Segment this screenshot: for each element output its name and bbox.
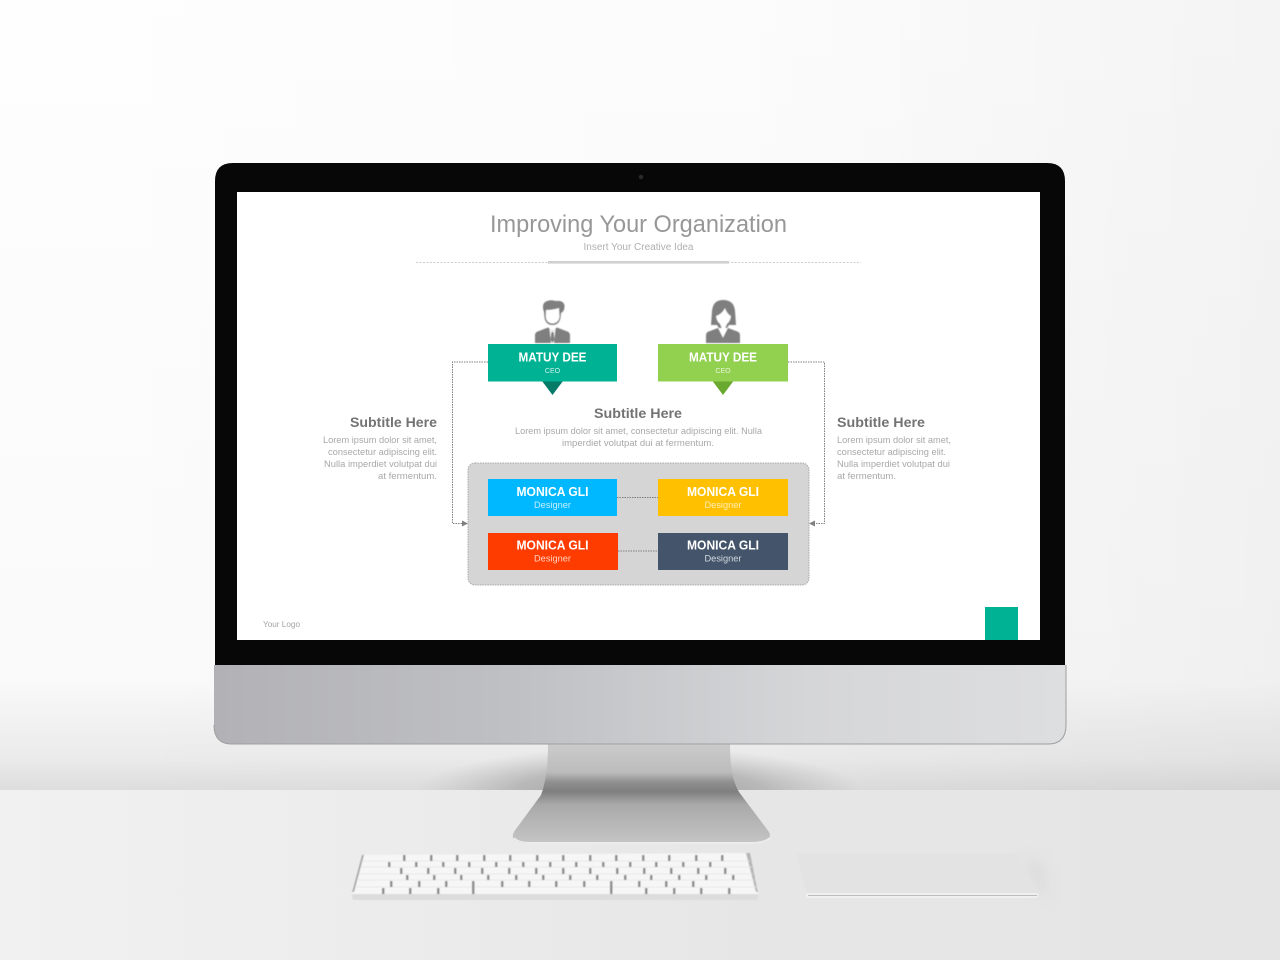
monitor bezel: [215, 163, 1065, 665]
monitor chin edge: [214, 665, 1066, 744]
card: Matuy Dee green: [658, 344, 788, 395]
text block: left: Lorem ipsum dolor sit amet,: [323, 435, 437, 446]
card: Matuy Dee green: CEO: [715, 368, 731, 375]
accent square: [985, 607, 1018, 640]
monitor stand: [513, 744, 770, 844]
card: Monica Gli blue: MONICA GLI: [516, 485, 588, 499]
logo text: Your Logo: [263, 619, 300, 629]
text block: left: Subtitle Here: [350, 415, 437, 430]
card: Monica Gli red: MONICA GLI: [516, 538, 588, 552]
text block: right: at fermentum.: [837, 471, 896, 482]
card: Monica Gli blue: Designer: [534, 500, 571, 511]
text block: left: Nulla imperdiet volutpat dui: [324, 459, 437, 470]
card: Monica Gli red: Designer: [534, 554, 571, 564]
card: Monica Gli yellow: Designer: [704, 500, 742, 511]
trackpad: [797, 853, 1048, 898]
card: Monica Gli navy: Designer: [704, 554, 742, 564]
text block: right: Subtitle Here: [837, 415, 926, 430]
text block: right: consectetur adipiscing elit.: [837, 447, 946, 458]
text block: right: [837, 415, 951, 482]
card: Matuy Dee teal: CEO: [545, 368, 561, 375]
connector: left: [452, 362, 488, 526]
screen: [237, 192, 1040, 640]
icon: man: [535, 300, 570, 343]
camera: [639, 175, 643, 179]
title divider: [416, 261, 861, 264]
monitor: [214, 163, 1066, 744]
icon: woman: [706, 300, 740, 343]
card: Monica Gli red: [488, 533, 618, 570]
team connector: top: [617, 496, 658, 498]
card: Matuy Dee teal: [488, 344, 617, 395]
panel: team: [468, 463, 809, 585]
card: Monica Gli blue: [488, 479, 617, 516]
card: Monica Gli yellow: MONICA GLI: [687, 485, 759, 499]
card: Monica Gli yellow: [658, 479, 788, 516]
text block: right: Nulla imperdiet volutpat dui: [837, 459, 950, 470]
text block: center: [515, 406, 763, 449]
text block: center: Lorem ipsum dolor sit amet, consectetur adipiscing elit. Nulla: [515, 426, 763, 437]
text block: left: consectetur adipiscing elit.: [328, 447, 437, 458]
text block: right: Lorem ipsum dolor sit amet,: [837, 435, 951, 446]
text block: left: at fermentum.: [378, 471, 437, 482]
slide title: Improving Your Organization: [490, 211, 787, 238]
text block: left: [323, 415, 437, 482]
card: Matuy Dee green: MATUY DEE: [689, 350, 757, 364]
text block: center: Subtitle Here: [594, 406, 683, 421]
text block: center: imperdiet volutpat dui at fermentum.: [562, 438, 714, 449]
card: Monica Gli navy: [658, 533, 788, 570]
connector: right: [788, 362, 824, 526]
slide subtitle: Insert Your Creative Idea: [584, 242, 694, 253]
team connector: bottom: [618, 550, 658, 552]
keyboard: [352, 853, 758, 900]
monitor chin: [214, 665, 1066, 744]
card: Monica Gli navy: MONICA GLI: [687, 538, 759, 552]
card: Matuy Dee teal: MATUY DEE: [518, 350, 586, 364]
